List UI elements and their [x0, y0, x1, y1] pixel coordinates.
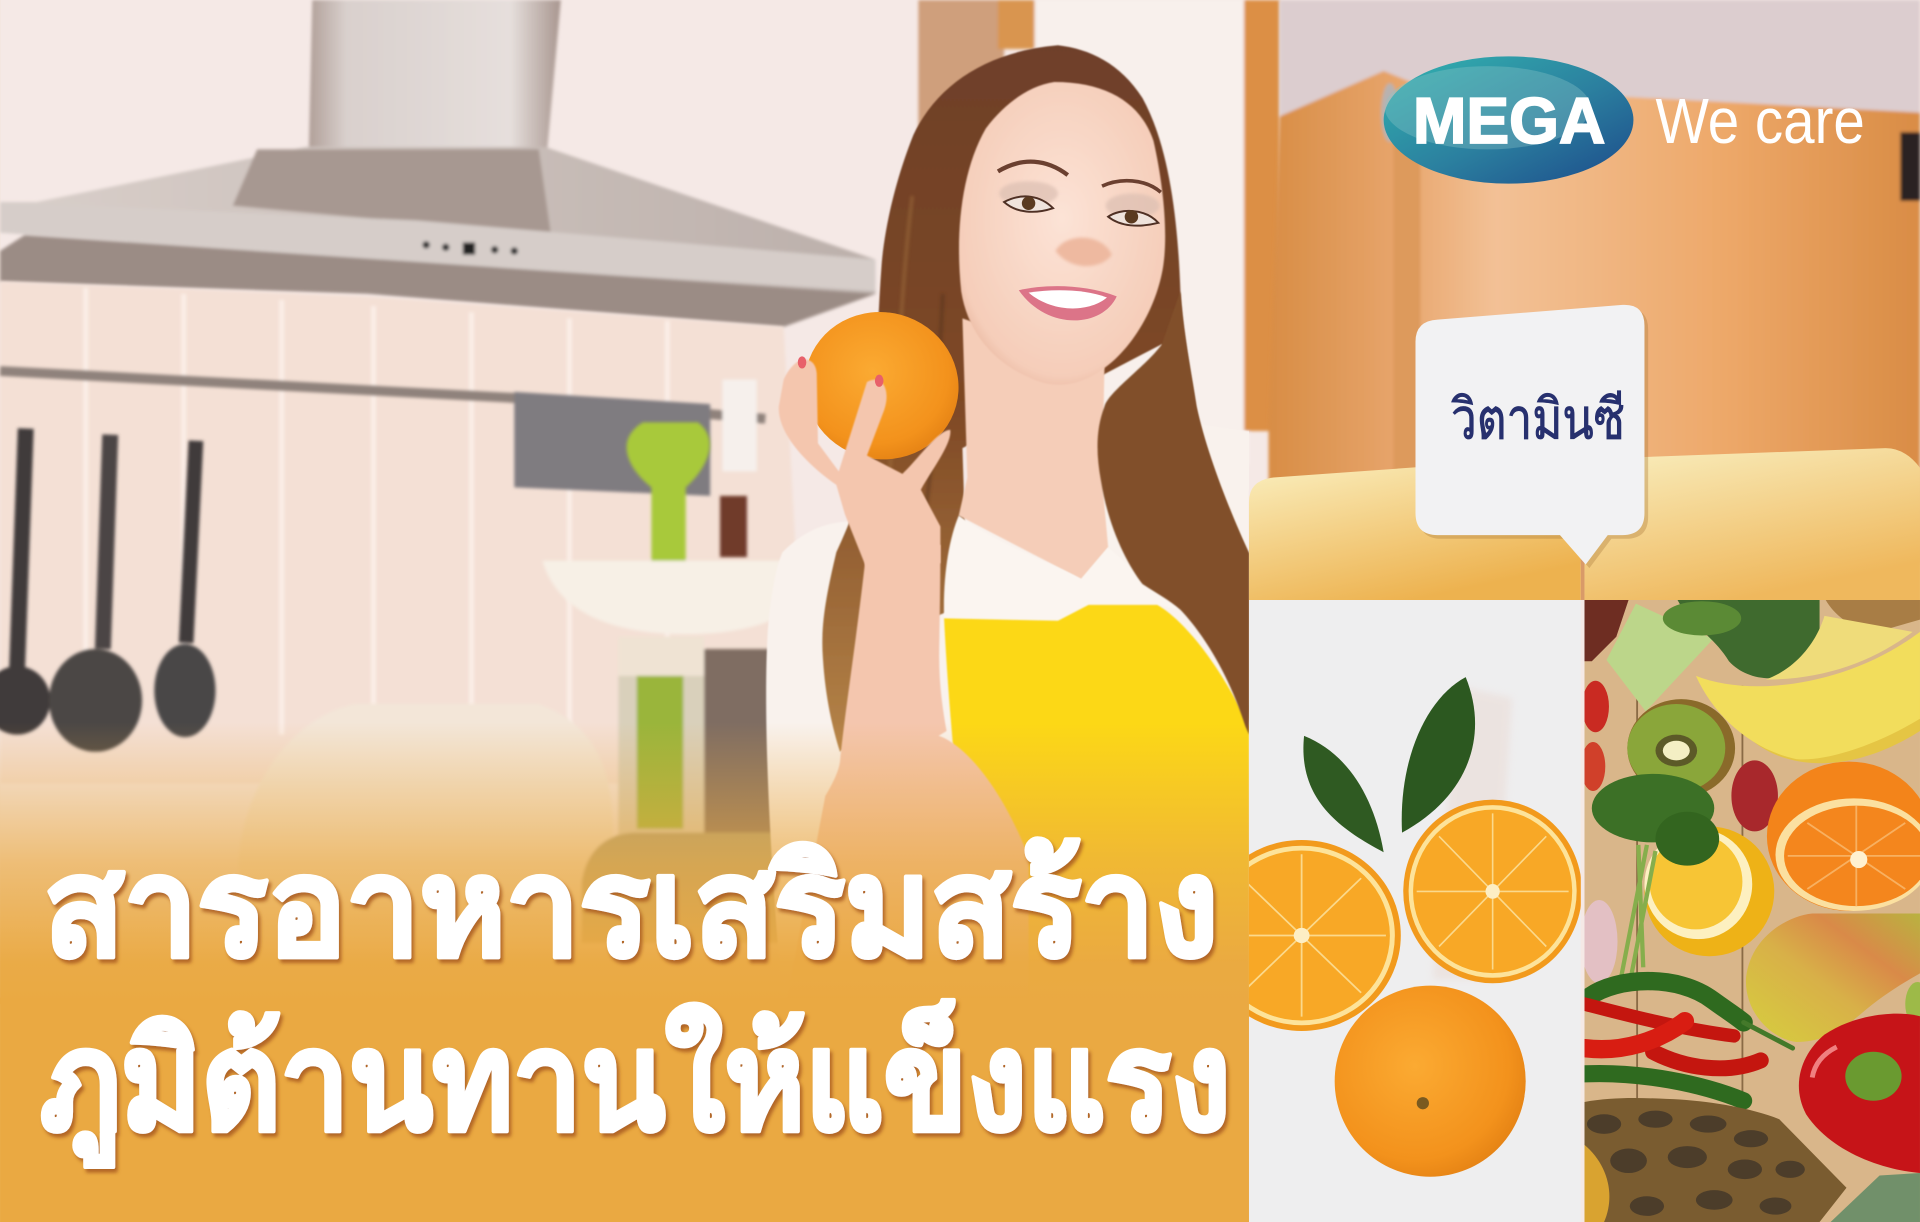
wood door column: [918, 0, 1280, 465]
callout: vitamin C: [1415, 305, 1648, 568]
nails: [798, 356, 883, 387]
lemon: [1644, 827, 1774, 956]
MEGA We care logo: We care: [1655, 86, 1865, 157]
hair front strand: [1098, 291, 1249, 735]
headline: [40, 832, 1231, 1167]
hair: [822, 45, 1249, 752]
woman holding an orange: [765, 44, 1249, 984]
yellow apron: [944, 605, 1249, 1016]
tile wall: [0, 282, 808, 784]
panel: citrus on white: [1249, 600, 1581, 1222]
leaf: [1303, 736, 1384, 852]
lime: [1905, 982, 1920, 1016]
orange fruit: [808, 312, 958, 460]
collar: [942, 515, 1108, 614]
face: [959, 82, 1165, 385]
hair strands: [889, 196, 945, 504]
MEGA We care logo: MEGA: [1413, 84, 1605, 157]
garlic: [1584, 900, 1618, 982]
gold tab: left: [1249, 455, 1581, 600]
pear: [1746, 913, 1920, 1042]
orange half: [1767, 762, 1920, 911]
headline: ภูมิต้านทานให้แข็งแรง: [40, 1000, 1231, 1167]
kiwi whole: [1826, 600, 1920, 628]
cooker hood: [0, 0, 876, 327]
broccoli: [1607, 600, 1820, 711]
pineapple: [1584, 1098, 1920, 1222]
strawberries: [1581, 681, 1778, 831]
orange slice: [1249, 840, 1401, 1031]
arm and lower hand: [802, 544, 1029, 954]
utensil rail and utensils: [0, 371, 765, 752]
red pepper: [1799, 1014, 1920, 1173]
ceiling and wood cabinet: [1269, 0, 1920, 563]
MEGA We care logo: [1384, 56, 1865, 184]
callout: vitamin C: วิตามินซี: [1451, 387, 1625, 450]
headline: สารอาหารเสริมสร้าง: [44, 832, 1218, 985]
gold tab: right: [1584, 448, 1920, 600]
leaf: [1402, 677, 1475, 833]
whole orange: [1335, 986, 1526, 1177]
bananas: [1696, 616, 1920, 763]
chillies: [1584, 981, 1793, 1101]
panel: mixed fruit and vegetables: [1581, 600, 1920, 1222]
dried berries: [1584, 600, 1629, 661]
neck and chest: [959, 318, 1108, 579]
orange slice: [1403, 800, 1582, 983]
hand holding the orange: [779, 360, 950, 569]
parsley: [1592, 774, 1719, 989]
juicer appliance: [239, 422, 830, 943]
white blouse: [765, 430, 1249, 942]
kiwi: [1627, 699, 1735, 797]
orange gradient band: [0, 722, 1249, 1004]
